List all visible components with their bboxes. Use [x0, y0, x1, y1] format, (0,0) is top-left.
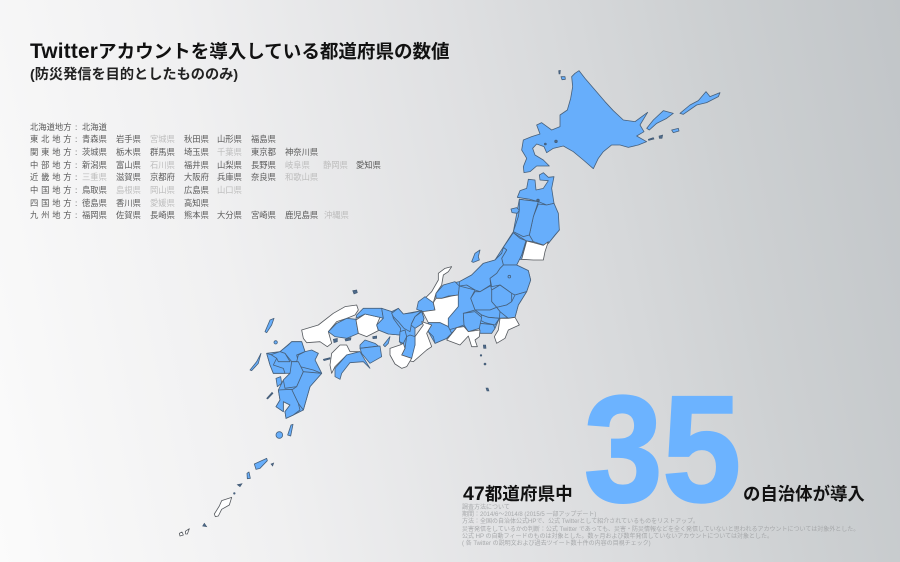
prefecture list by region: 愛媛県 — [150, 198, 175, 208]
prefecture list by region: 鹿児島県 — [285, 210, 318, 220]
prefecture list by region: 熊本県 — [184, 210, 209, 220]
big number 35: 35 — [584, 364, 741, 533]
prefecture list by region: 沖縄県 — [324, 210, 349, 220]
prefecture list by region: 長崎県 — [150, 210, 175, 220]
prefecture list by region: 栃木県 — [116, 147, 141, 157]
map: Tohoku south and Kanto — [471, 233, 531, 365]
prefecture list by region: 岡山県 — [150, 185, 175, 195]
prefecture list by region: 長野県 — [251, 160, 276, 170]
prefecture list by region: 青森県 — [82, 134, 107, 144]
prefecture list by region: 兵庫県 — [217, 172, 242, 182]
prefecture list by region: 静岡県 — [323, 160, 348, 170]
prefecture list by region: : — [75, 198, 77, 208]
caption right: の自治体が導入: の自治体が導入 — [743, 484, 865, 504]
map: central Honshu base — [428, 233, 531, 343]
prefecture list by region: : — [75, 147, 77, 157]
prefecture list by region: 秋田県 — [184, 134, 209, 144]
map: Tohoku — [495, 173, 559, 260]
map: Chubu — [417, 247, 507, 347]
prefecture list by region: 宮城県 — [150, 134, 175, 144]
prefecture list by region: 茨城県 — [82, 147, 107, 157]
map: Okinawa and Amami islands — [179, 458, 274, 536]
prefecture list by region: : — [75, 134, 77, 144]
prefecture list by region: 京都府 — [150, 172, 175, 182]
survey method notes: 災害発信をしているかの判断：公式 Twitter であっても、災害・防災情報などを全く発信していないと思われるアカウントについては対象外とした。 — [462, 526, 859, 532]
prefecture list by region: 三重県 — [82, 172, 107, 182]
prefecture list by region: 福岡県 — [82, 210, 107, 220]
prefecture list by region: 奈良県 — [251, 172, 276, 182]
map: Kyushu — [250, 318, 322, 438]
prefecture list by region: 北海道地方 — [30, 122, 72, 132]
prefecture list by region: 愛知県 — [356, 160, 381, 170]
prefecture list by region: : — [75, 210, 77, 220]
prefecture list by region: : — [75, 185, 77, 195]
survey method notes: ( 各 Twitter の説明文および過去ツイート数十件の内容の目視チェック) — [462, 541, 651, 547]
survey method notes: 公式 HP の自動フィードのものは対象とした。数ヶ月および数年発信していないアカウントについては対象とした。 — [462, 534, 773, 540]
survey method notes: 方法：全国の自治体公式HPで、公式 Twitterとして紹介されているものをリストアップ。 — [462, 519, 699, 525]
prefecture list by region: 東京都 — [251, 147, 276, 157]
prefecture list by region: 滋賀県 — [116, 172, 141, 182]
prefecture list by region: 新潟県 — [82, 160, 107, 170]
map: small islet — [486, 388, 489, 391]
prefecture list by region: 関東地方 — [30, 147, 74, 157]
prefecture list by region: 岩手県 — [116, 134, 141, 144]
prefecture list by region: 中国地方 — [30, 185, 74, 195]
prefecture list by region: 高知県 — [184, 198, 209, 208]
prefecture list by region: 広島県 — [184, 185, 209, 195]
prefecture list by region: 北海道 — [82, 122, 107, 132]
prefecture list by region: 山口県 — [217, 185, 242, 195]
prefecture list by region: 山梨県 — [217, 160, 242, 170]
prefecture list by region: 和歌山県 — [285, 172, 318, 182]
survey method notes: 調査方法について — [462, 505, 510, 511]
prefecture list by region — [30, 122, 381, 220]
prefecture list by region: 福井県 — [184, 160, 209, 170]
prefecture list by region: 九州地方 — [30, 210, 74, 220]
prefecture list by region: 福島県 — [251, 134, 276, 144]
prefecture list by region: 東北地方 — [30, 134, 74, 144]
prefecture list by region: 山形県 — [217, 134, 242, 144]
prefecture list by region: 四国地方 — [30, 198, 74, 208]
prefecture list by region: 埼玉県 — [184, 147, 209, 157]
prefecture list by region: 香川県 — [116, 198, 141, 208]
prefecture list by region: 佐賀県 — [116, 210, 141, 220]
prefecture list by region: 徳島県 — [82, 198, 107, 208]
title: Twitterアカウントを導入している都道府県の数値 — [30, 40, 450, 63]
prefecture list by region: 中部地方 — [30, 160, 74, 170]
prefecture list by region: 宮崎県 — [251, 210, 276, 220]
prefecture list by region: 神奈川県 — [285, 147, 318, 157]
prefecture list by region: 富山県 — [116, 160, 141, 170]
prefecture list by region: 近畿地方 — [30, 172, 74, 182]
prefecture list by region: 岐阜県 — [285, 160, 310, 170]
survey method notes: 期間：2014/6～2014/8 (2015/5 一部アップデート) — [462, 512, 596, 518]
prefecture list by region: : — [75, 122, 77, 132]
survey method notes — [462, 504, 859, 547]
prefecture list by region: : — [75, 160, 77, 170]
prefecture list by region: 千葉県 — [217, 147, 242, 157]
prefecture list by region: 島根県 — [116, 185, 141, 195]
map: Kinki, Chugoku, Shikoku — [302, 290, 432, 379]
map: Hokkaido — [522, 70, 720, 173]
subtitle: (防災発信を目的としたもののみ) — [30, 67, 238, 83]
caption left: 47都道府県中: 47都道府県中 — [463, 483, 573, 505]
prefecture list by region: 群馬県 — [150, 147, 175, 157]
prefecture list by region: : — [75, 172, 77, 182]
prefecture list by region: 大分県 — [217, 210, 242, 220]
prefecture list by region: 石川県 — [150, 160, 175, 170]
prefecture list by region: 鳥取県 — [82, 185, 107, 195]
prefecture list by region: 大阪府 — [184, 172, 209, 182]
